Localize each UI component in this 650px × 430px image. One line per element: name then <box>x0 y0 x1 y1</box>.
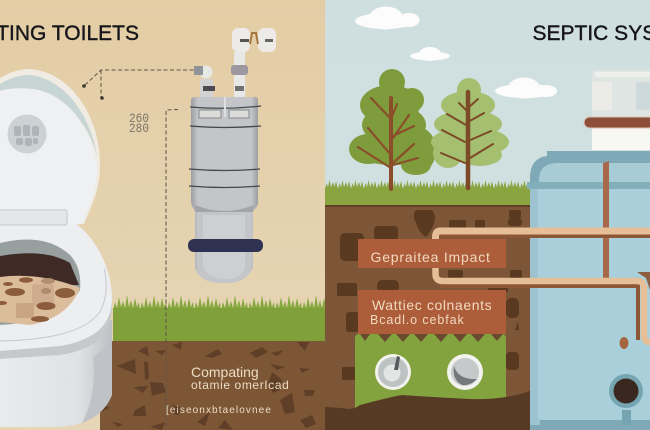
lid vent badge <box>8 114 46 154</box>
caption: composting: [eiseonxbtaelovnee <box>166 405 272 416</box>
vertical brown pipe <box>603 161 609 278</box>
upper stack pipes and valves <box>231 28 276 97</box>
left tap and valve <box>194 66 215 97</box>
icon: composting unit tank <box>188 28 276 283</box>
right ground: grass and soil <box>325 179 531 430</box>
cloud 2 <box>410 47 450 61</box>
tank straps <box>189 106 261 188</box>
brown pipe across vent box <box>584 117 650 128</box>
title: composting toilets: TING TOILETS <box>0 22 139 45</box>
lid hinge plate <box>0 210 67 225</box>
panel: septic system sky background <box>325 0 650 430</box>
label: generated impact: Gepraitea Impact <box>370 249 491 265</box>
green buried chamber <box>325 334 530 430</box>
tank body <box>191 97 258 283</box>
toilet seat ring <box>0 225 112 359</box>
dimension label <box>129 111 149 136</box>
dark foreground soil <box>325 391 530 430</box>
label: waste components: Wattiec colnaents <box>372 297 492 313</box>
label: waste components: Bcadl.o cebfak <box>370 313 465 327</box>
caption: composting: Compating <box>191 364 259 380</box>
small brown plug <box>620 337 628 349</box>
left ground: grass and soil <box>94 293 325 430</box>
pipe fitting <box>637 272 650 290</box>
gauge: right dial <box>447 354 483 390</box>
chamber notched top edge <box>360 334 503 342</box>
label: generated impact <box>358 239 506 268</box>
icon: tree, dark green <box>349 69 436 189</box>
cloud 3 <box>495 78 557 98</box>
tank dark collar <box>188 239 263 252</box>
dashed leader lines <box>85 70 195 430</box>
compost-filled bowl opening <box>0 239 80 325</box>
icon: septic tank <box>436 151 650 430</box>
toilet bowl body <box>0 320 112 427</box>
drain outlet <box>609 374 643 425</box>
toilet lid <box>0 69 100 226</box>
label: waste components <box>358 290 506 334</box>
dimension label: 260 <box>129 111 149 126</box>
gauge: left dial <box>375 354 411 390</box>
caption: composting <box>166 364 289 416</box>
cloud 1 <box>355 6 420 30</box>
icon: composting toilet <box>0 69 112 427</box>
tan inlet pipe, lower <box>436 266 650 342</box>
icon: white vent box above tank <box>584 70 650 150</box>
tank windows <box>199 110 249 118</box>
dimension label: 280 <box>129 121 149 136</box>
panel: composting toilets background <box>0 0 325 430</box>
tan inlet pipe, upper <box>436 231 650 245</box>
caption: composting: otamie omerIcad <box>191 378 289 392</box>
icon: tree, light green <box>431 78 509 188</box>
leader line end dots <box>82 84 104 100</box>
